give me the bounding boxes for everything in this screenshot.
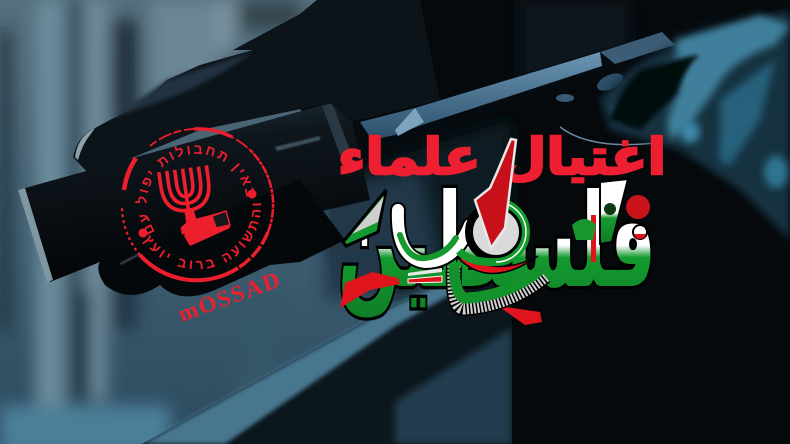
icon: pistol slide [355, 12, 735, 165]
calligraphy word: فلسطين [338, 167, 656, 318]
icon: red rose [626, 195, 650, 219]
left ribbon curve ornament [398, 210, 470, 262]
icon: fingers under the barrel [98, 180, 345, 296]
small flag bars [408, 268, 442, 283]
artwork: Palestine calligraphy [338, 139, 656, 325]
icon: upper glove gripping the barrel [73, 0, 440, 175]
ornamental chain sweep [454, 266, 545, 308]
stamp Hebrew upper inscription: באין תחבולות יפול עם [135, 145, 254, 235]
icon: menorah [159, 165, 215, 236]
background photo: dark coat and right side [260, 0, 790, 444]
emblem: Mossad stamp [120, 127, 285, 327]
left swash ornament [343, 190, 386, 246]
red crescent [458, 256, 538, 274]
red ribbons [340, 215, 596, 325]
railing in foreground [142, 248, 790, 444]
stamp Hebrew lower inscription: והתשועה ברוב יועץ [142, 203, 262, 270]
tall stroke in flag colours [600, 179, 628, 244]
stamp outer ring [122, 129, 273, 280]
circular bowl ornament [469, 205, 523, 259]
circular flag emblem [633, 225, 647, 239]
icon: map of Palestine [475, 139, 516, 248]
stamp separator dots [138, 190, 256, 238]
heading: title: اغتيال علماء [338, 129, 666, 186]
icon: mosque dome [572, 219, 596, 240]
icon: right glove [600, 10, 790, 240]
label: MOSSAD: mOSSAD [175, 266, 285, 327]
icon: gun barrel with silencer [18, 103, 370, 282]
icon: menorah stepped base [184, 212, 230, 246]
